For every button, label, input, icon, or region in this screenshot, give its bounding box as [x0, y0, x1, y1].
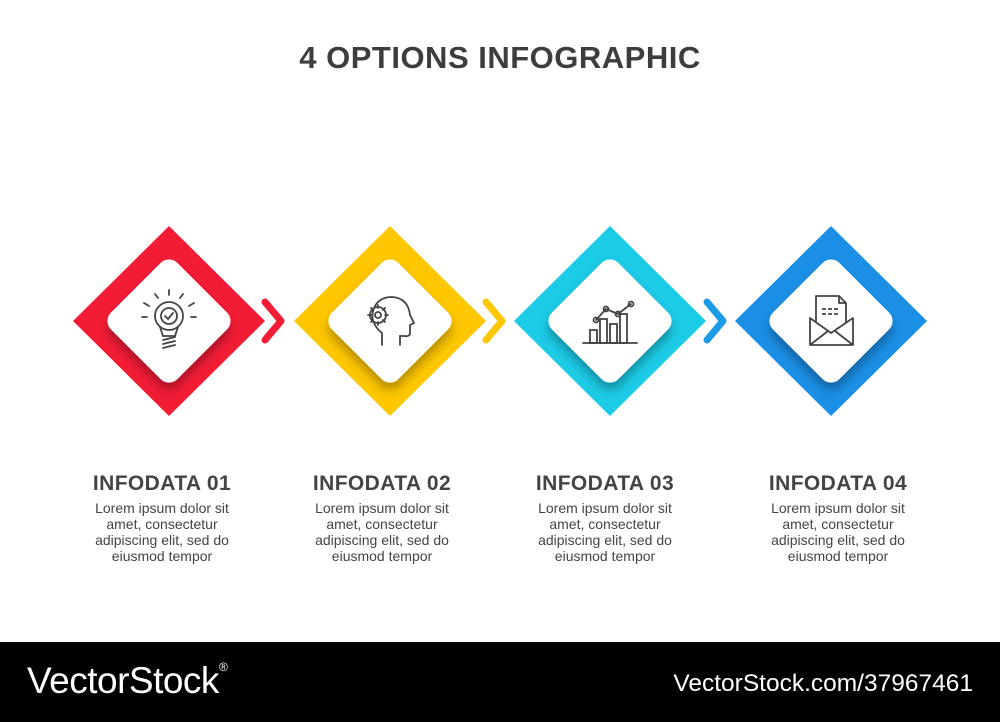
- text block 3: INFODATA 03: [536, 472, 674, 495]
- title: 4 OPTIONS INFOGRAPHIC: [299, 40, 701, 75]
- text block 3: amet, consectetur: [549, 516, 661, 532]
- icon: lightbulb: [142, 290, 196, 348]
- text block 2: [313, 472, 451, 564]
- text block 1: eiusmod tempor: [112, 548, 212, 564]
- arrow 3: [707, 302, 723, 340]
- text block 4: Lorem ipsum dolor sit: [771, 500, 905, 516]
- text block 4: eiusmod tempor: [788, 548, 888, 564]
- text block 3: adipiscing elit, sed do: [538, 532, 672, 548]
- icon: bar chart: [583, 302, 637, 343]
- text block 1: adipiscing elit, sed do: [95, 532, 229, 548]
- text block 4: amet, consectetur: [782, 516, 894, 532]
- footer logo: VectorStock®: [27, 660, 227, 701]
- footer bar: [0, 642, 1000, 722]
- text block 4: INFODATA 04: [769, 472, 907, 495]
- diamond 4: [735, 226, 927, 416]
- text block 1: amet, consectetur: [106, 516, 218, 532]
- footer id: VectorStock.com/37967461: [673, 670, 973, 697]
- text block 1: INFODATA 01: [93, 472, 231, 495]
- text block 1: [93, 472, 231, 564]
- diamond 2: [294, 226, 486, 416]
- text block 2: eiusmod tempor: [332, 548, 432, 564]
- icon: envelope: [810, 296, 853, 345]
- diamond 1: [73, 226, 265, 416]
- text block 1: Lorem ipsum dolor sit: [95, 500, 229, 516]
- text block 4: adipiscing elit, sed do: [771, 532, 905, 548]
- arrow 1: [265, 302, 281, 340]
- text block 2: amet, consectetur: [326, 516, 438, 532]
- text block 2: INFODATA 02: [313, 472, 451, 495]
- text block 3: [536, 472, 674, 564]
- icon: head with gear: [368, 297, 414, 345]
- text block 4: [769, 472, 907, 564]
- text block 2: Lorem ipsum dolor sit: [315, 500, 449, 516]
- text block 3: eiusmod tempor: [555, 548, 655, 564]
- text block 3: Lorem ipsum dolor sit: [538, 500, 672, 516]
- diamond 3: [514, 226, 706, 416]
- text block 2: adipiscing elit, sed do: [315, 532, 449, 548]
- arrow 2: [486, 302, 502, 340]
